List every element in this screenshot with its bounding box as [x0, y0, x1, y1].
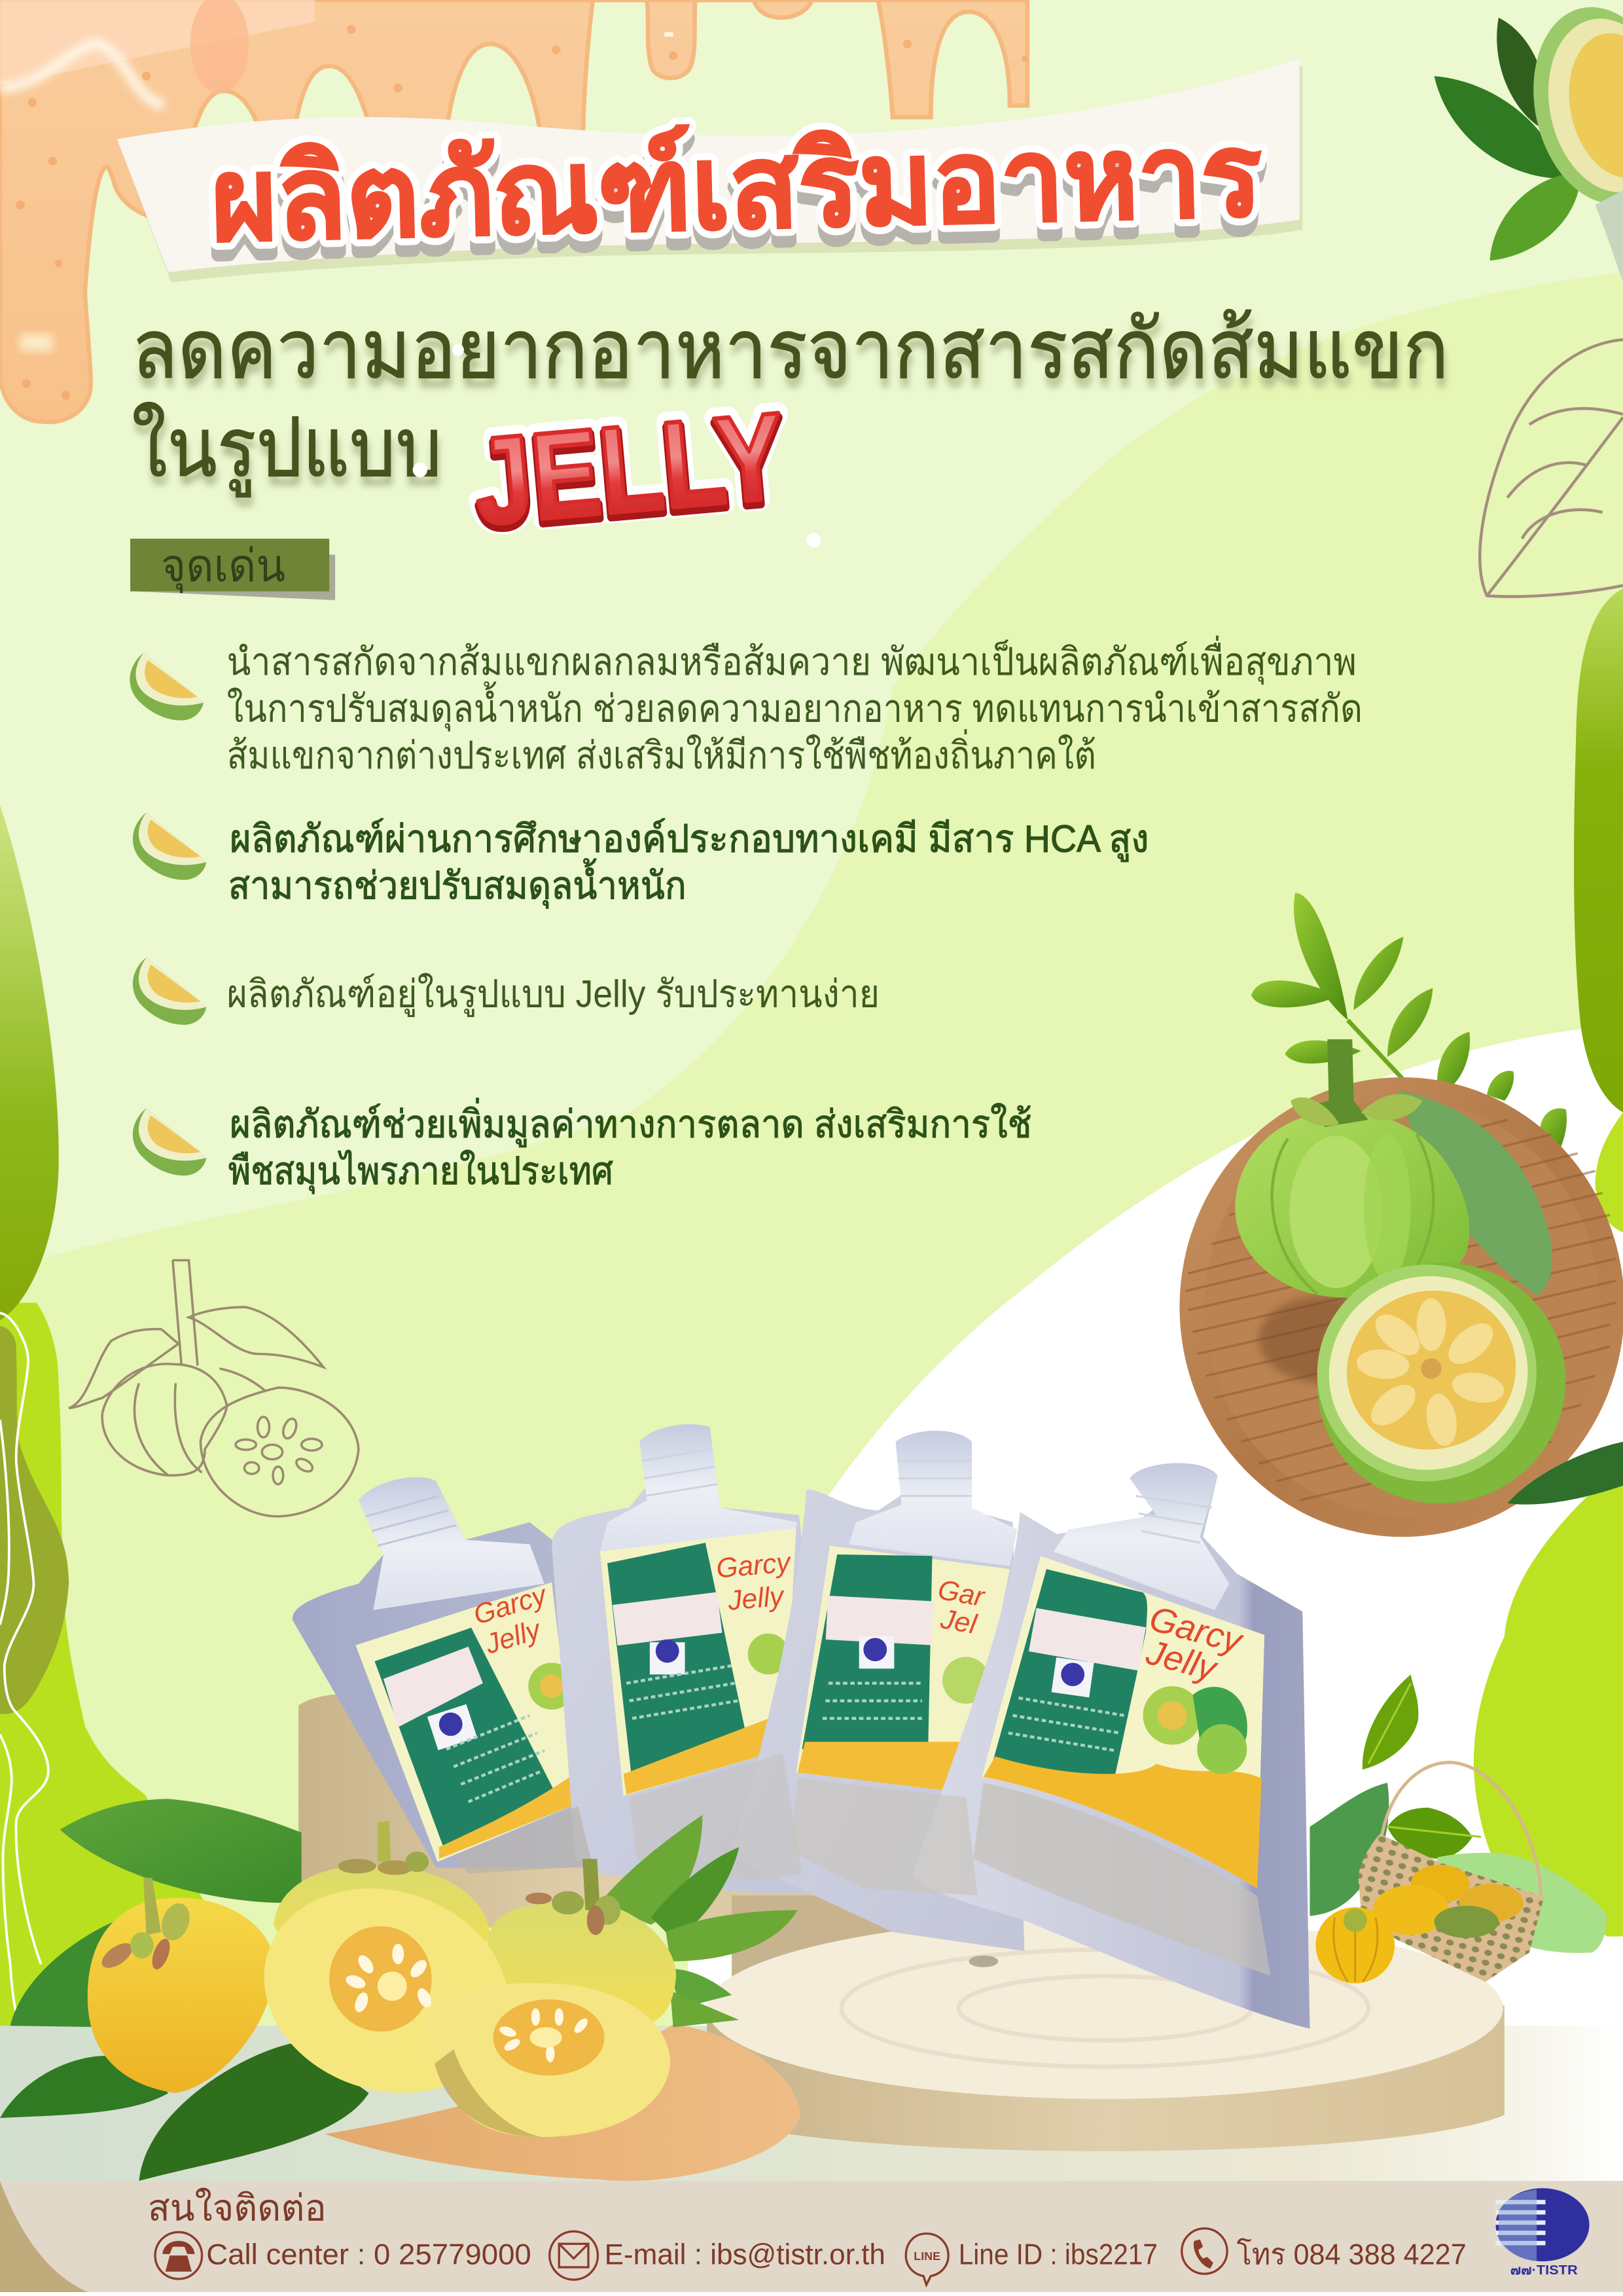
contact: line: LINE [914, 2250, 940, 2263]
contact: phone [1182, 2229, 1467, 2274]
contact: call center [155, 2232, 531, 2279]
right green strip [1574, 588, 1623, 1113]
jelly pouch 3 [730, 1431, 1024, 1951]
bullet 2 text [228, 818, 1149, 909]
jelly pouch 3: Jel [938, 1604, 980, 1640]
jelly pouch 1: Jelly [481, 1614, 546, 1660]
bullet 4 text: พืชสมุนไพรภายในประเทศ [228, 1149, 613, 1194]
fruit leaves bottom [0, 1799, 798, 2181]
bullet 2 text: สามารถช่วยปรับสมดุลน้ำหนัก [228, 858, 687, 909]
right lime blob [1474, 1113, 1623, 1937]
subtitle: ในรูปแบบ [133, 410, 444, 506]
bullet 4 text: ผลิตภัณฑ์ช่วยเพิ่มมูลค่าทางการตลาด ส่งเสริมการใช้ [230, 1098, 1032, 1147]
floor [0, 2026, 1623, 2181]
jelly pouch 3: Gar [935, 1575, 988, 1613]
jelly pouch 1 [293, 1477, 615, 1868]
bullet 1 text: ส้มแขกจากต่างประเทศ ส่งเสริมให้มีการใช้พืชท้องถิ่นภาคใต้ [227, 729, 1096, 777]
jelly pouch 2: Jelly [726, 1581, 787, 1617]
contact: line [906, 2234, 1158, 2285]
subtitle: ลดความอยากอาหารจากสารสกัดส้มแขก [132, 304, 1449, 395]
title banner [117, 59, 1302, 283]
JELLY logo: JELLY [469, 386, 790, 550]
highlight tag: จุดเด่น [161, 540, 285, 594]
bullet 1 text: ในการปรับสมดุลน้ำหนัก ช่วยลดความอยากอาหาร ทดแทนการนำเข้าสารสกัด [227, 681, 1363, 732]
left yellow fruit [88, 1878, 275, 2093]
basket of fruit [1315, 1763, 1544, 1983]
title text: ผลิตภัณฑ์เสริมอาหาร [209, 111, 1263, 265]
honey drips [0, 0, 1027, 422]
large cut fruit [238, 1857, 535, 2124]
left green blobs [0, 805, 205, 2049]
TISTR logo: ๗๗·TISTR [1510, 2263, 1578, 2278]
jelly pouch 4: Garcy [1145, 1599, 1248, 1662]
right leaves by the basket [1310, 1674, 1607, 1953]
subtitle [132, 304, 1450, 506]
bullet icon 4 [133, 1108, 206, 1175]
bullet icon 1 [130, 653, 204, 721]
title text: ผลิตภัณฑ์เสริมอาหาร [209, 111, 1263, 265]
back wood podium [298, 1695, 1054, 2013]
yellow garcinia fruits [88, 1821, 676, 2137]
front wood podium [707, 1918, 1505, 2151]
jelly pouch 4: Jelly [1142, 1632, 1222, 1689]
jelly pouch 1: Garcy [470, 1579, 552, 1631]
body text block [227, 636, 1363, 1194]
bullet 3 text: ผลิตภัณฑ์อยู่ในรูปแบบ Jelly รับประทานง่าย [227, 973, 880, 1017]
title text: ผลิตภัณฑ์เสริมอาหาร [209, 124, 1263, 278]
sprig of leaves [1251, 893, 1567, 1149]
subtitle: ในรูปแบบ [132, 402, 442, 497]
jelly pouch 2: Garcy [715, 1547, 793, 1585]
small cut fruit [421, 1983, 670, 2137]
white sparkle dots [413, 344, 821, 547]
plate leaf [1398, 1090, 1623, 1505]
contact: email [550, 2231, 885, 2280]
jelly pouch 2 [552, 1424, 842, 1894]
bullet 4 text [228, 1098, 1032, 1194]
contact: line: Line ID : ibs2217 [959, 2239, 1158, 2271]
JELLY logo: JELLY [469, 391, 790, 555]
highlight tag [130, 539, 335, 600]
cut green fruit [1291, 1235, 1593, 1532]
subtitle: ลดความอยากอาหารจากสารสกัดส้มแขก [133, 312, 1450, 404]
contact: call center: Call center : 0 25779000 [206, 2239, 531, 2271]
bullet icon 3 [133, 958, 206, 1025]
whole green fruit [1235, 1039, 1469, 1298]
wooden serving board [325, 2024, 800, 2181]
TISTR logo [1495, 2188, 1590, 2278]
pouch translucent lower panels [454, 1753, 1270, 1976]
bullet 1 text: นำสารสกัดจากส้มแขกผลกลมหรือส้มควาย พัฒนาเป็นผลิตภัณฑ์เพื่อสุขภาพ [227, 636, 1357, 685]
top-right garcinia fruit and leaves [1435, 0, 1623, 281]
right pale fruit [487, 1859, 676, 2027]
bullet 1 text [227, 636, 1363, 777]
bullet icon 2 [133, 812, 206, 880]
contact: phone: โทร 084 388 4227 [1237, 2238, 1467, 2271]
contact heading: สนใจติดต่อ [148, 2187, 327, 2228]
bullet 2 text: ผลิตภัณฑ์ผ่านการศึกษาองค์ประกอบทางเคมี มีสาร HCA สูง [230, 818, 1149, 862]
fruit line sketch [69, 1261, 359, 1516]
contact: email: E-mail : ibs@tistr.or.th [605, 2239, 885, 2271]
footer band [0, 2181, 1623, 2296]
JELLY logo: JELLY [469, 386, 790, 550]
jelly pouch 4 [913, 1463, 1310, 2029]
wooden plate [1179, 1077, 1623, 1537]
back pale fruit [274, 1821, 490, 1962]
leaf line sketch right [1480, 340, 1623, 596]
